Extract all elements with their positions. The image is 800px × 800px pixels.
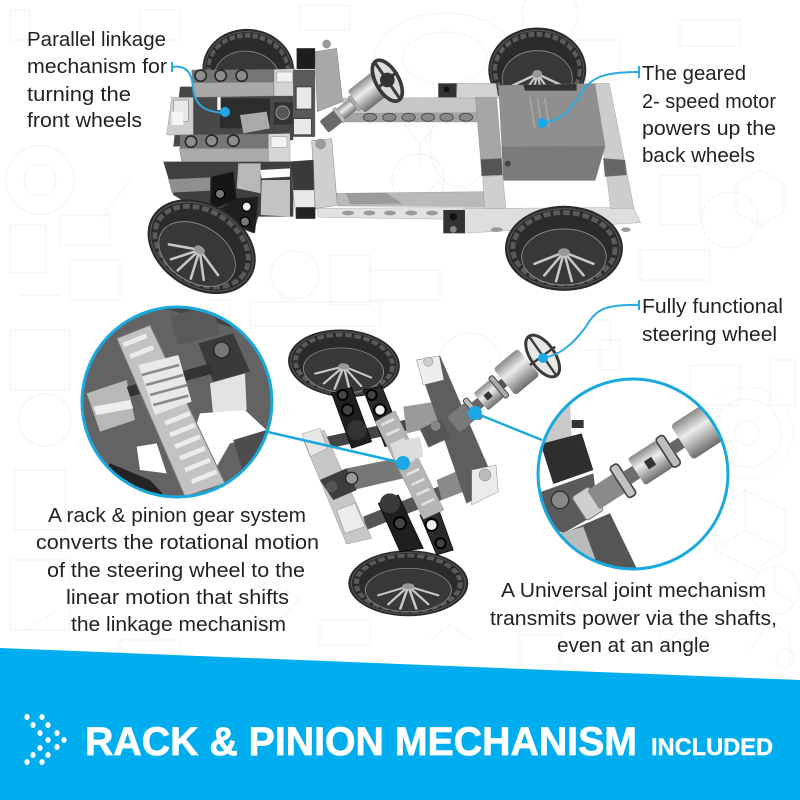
inset ring: rack and pinion <box>82 307 272 497</box>
text: parallel linkage: front wheels <box>27 110 142 132</box>
text: rack and pinion: of the steering wheel to the <box>47 560 305 582</box>
text: universal joint: even at an angle <box>557 635 710 657</box>
rack gear <box>375 411 444 519</box>
lower front suspension arms <box>210 172 258 233</box>
inset: universal joint closeup <box>541 400 725 568</box>
text: parallel linkage <box>27 29 167 132</box>
callout line: motor <box>537 66 639 128</box>
right dark crossbar <box>417 356 498 505</box>
back-top wheel <box>488 27 586 113</box>
left light crossbar <box>302 428 372 544</box>
cross rods <box>327 400 470 530</box>
text: universal joint <box>490 580 777 657</box>
lower front beam <box>179 133 290 162</box>
holes in lower rail <box>342 211 631 232</box>
top front beam <box>192 69 295 97</box>
steering assembly illustration <box>286 326 498 616</box>
lower front frame <box>163 162 293 233</box>
text: geared motor: powers up the <box>642 118 776 140</box>
text: universal joint: transmits power via the shafts, <box>490 608 777 630</box>
steering wheel shaft <box>442 329 566 438</box>
car chassis illustration <box>130 23 641 313</box>
text: rack and pinion <box>36 505 319 636</box>
text: rack and pinion: A rack & pinion gear system <box>48 505 306 527</box>
banner title: RACK & PINION MECHANISM <box>85 720 637 764</box>
holes in upper rail <box>363 113 473 121</box>
text: parallel linkage: mechanism for <box>27 56 167 78</box>
left end block <box>167 97 193 135</box>
front-bottom wheel <box>130 180 273 313</box>
lower assembly wheel <box>348 550 468 616</box>
banner suffix: INCLUDED <box>651 734 773 761</box>
text: steering wheel: steering wheel <box>642 324 777 346</box>
connector: rack inset <box>268 432 410 470</box>
text: geared motor <box>642 63 776 167</box>
text: universal joint: A Universal joint mechanism <box>501 580 766 602</box>
text: geared motor: The geared <box>642 63 746 85</box>
front frame dark interior <box>173 87 293 147</box>
upper assembly wheel <box>286 326 402 401</box>
text: geared motor: back wheels <box>642 145 755 167</box>
text: rack and pinion: the linkage mechanism <box>71 614 286 636</box>
text: geared motor: 2- speed motor <box>642 91 776 113</box>
text: rack and pinion: converts the rotational motion <box>36 532 319 554</box>
motor box <box>498 83 605 181</box>
icon: dotted chevron <box>24 714 67 765</box>
callout line: linkage <box>172 62 230 117</box>
banner <box>0 648 800 800</box>
text: steering wheel <box>642 296 783 346</box>
column and uprights <box>290 48 343 219</box>
inset: rack and pinion closeup <box>80 305 277 502</box>
back-bottom wheel <box>505 206 623 291</box>
text: parallel linkage: turning the <box>27 84 131 106</box>
front-top wheel <box>197 23 300 117</box>
connector: joint inset <box>468 406 542 440</box>
text: parallel linkage: Parallel linkage <box>27 29 166 51</box>
small connector blocks <box>438 83 457 97</box>
text: steering wheel: Fully functional <box>642 296 783 318</box>
chassis rails <box>317 83 641 233</box>
steering column <box>315 55 408 138</box>
callout line: steering wheel <box>538 300 639 363</box>
black link arms <box>332 386 453 555</box>
inset ring: universal joint <box>538 379 728 569</box>
text: rack and pinion: linear motion that shifts <box>66 587 289 609</box>
